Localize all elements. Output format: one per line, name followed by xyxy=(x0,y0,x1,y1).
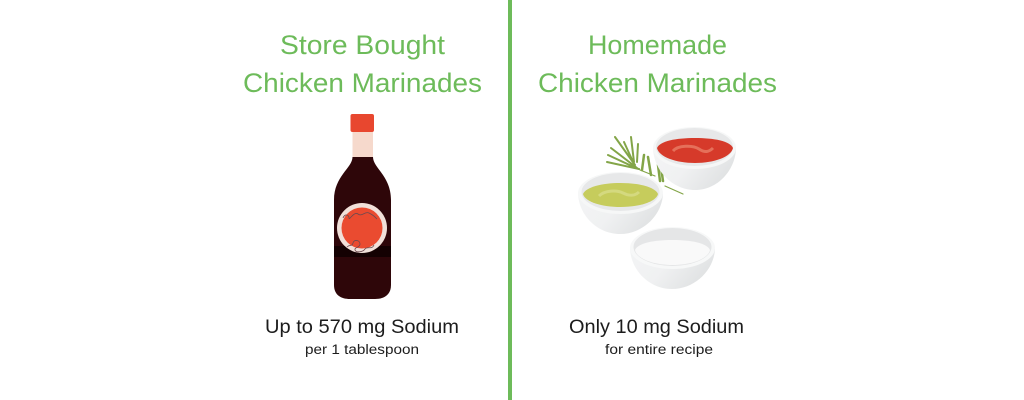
heading: store bought: Chicken Marinades xyxy=(243,68,482,98)
icon: green sauce bowl xyxy=(578,172,663,234)
caption: store bought sodium xyxy=(265,317,459,357)
caption: store bought sodium: per 1 tablespoon xyxy=(305,342,419,357)
icon: marinade bottle xyxy=(334,114,391,299)
heading: store bought xyxy=(243,30,482,98)
icon: rosemary sprig xyxy=(607,137,683,194)
icon: white sauce bowl xyxy=(630,227,715,289)
icon: red sauce bowl xyxy=(653,127,736,190)
heading: homemade: Chicken Marinades xyxy=(538,68,777,98)
heading: homemade: Homemade xyxy=(588,30,727,60)
heading: store bought: Store Bought xyxy=(280,30,446,60)
caption: homemade sodium: for entire recipe xyxy=(605,342,713,357)
caption: homemade sodium xyxy=(569,317,744,357)
center divider xyxy=(508,0,512,400)
heading: homemade xyxy=(538,30,777,98)
caption: homemade sodium: Only 10 mg Sodium xyxy=(569,317,744,338)
caption: store bought sodium: Up to 570 mg Sodium xyxy=(265,317,459,338)
